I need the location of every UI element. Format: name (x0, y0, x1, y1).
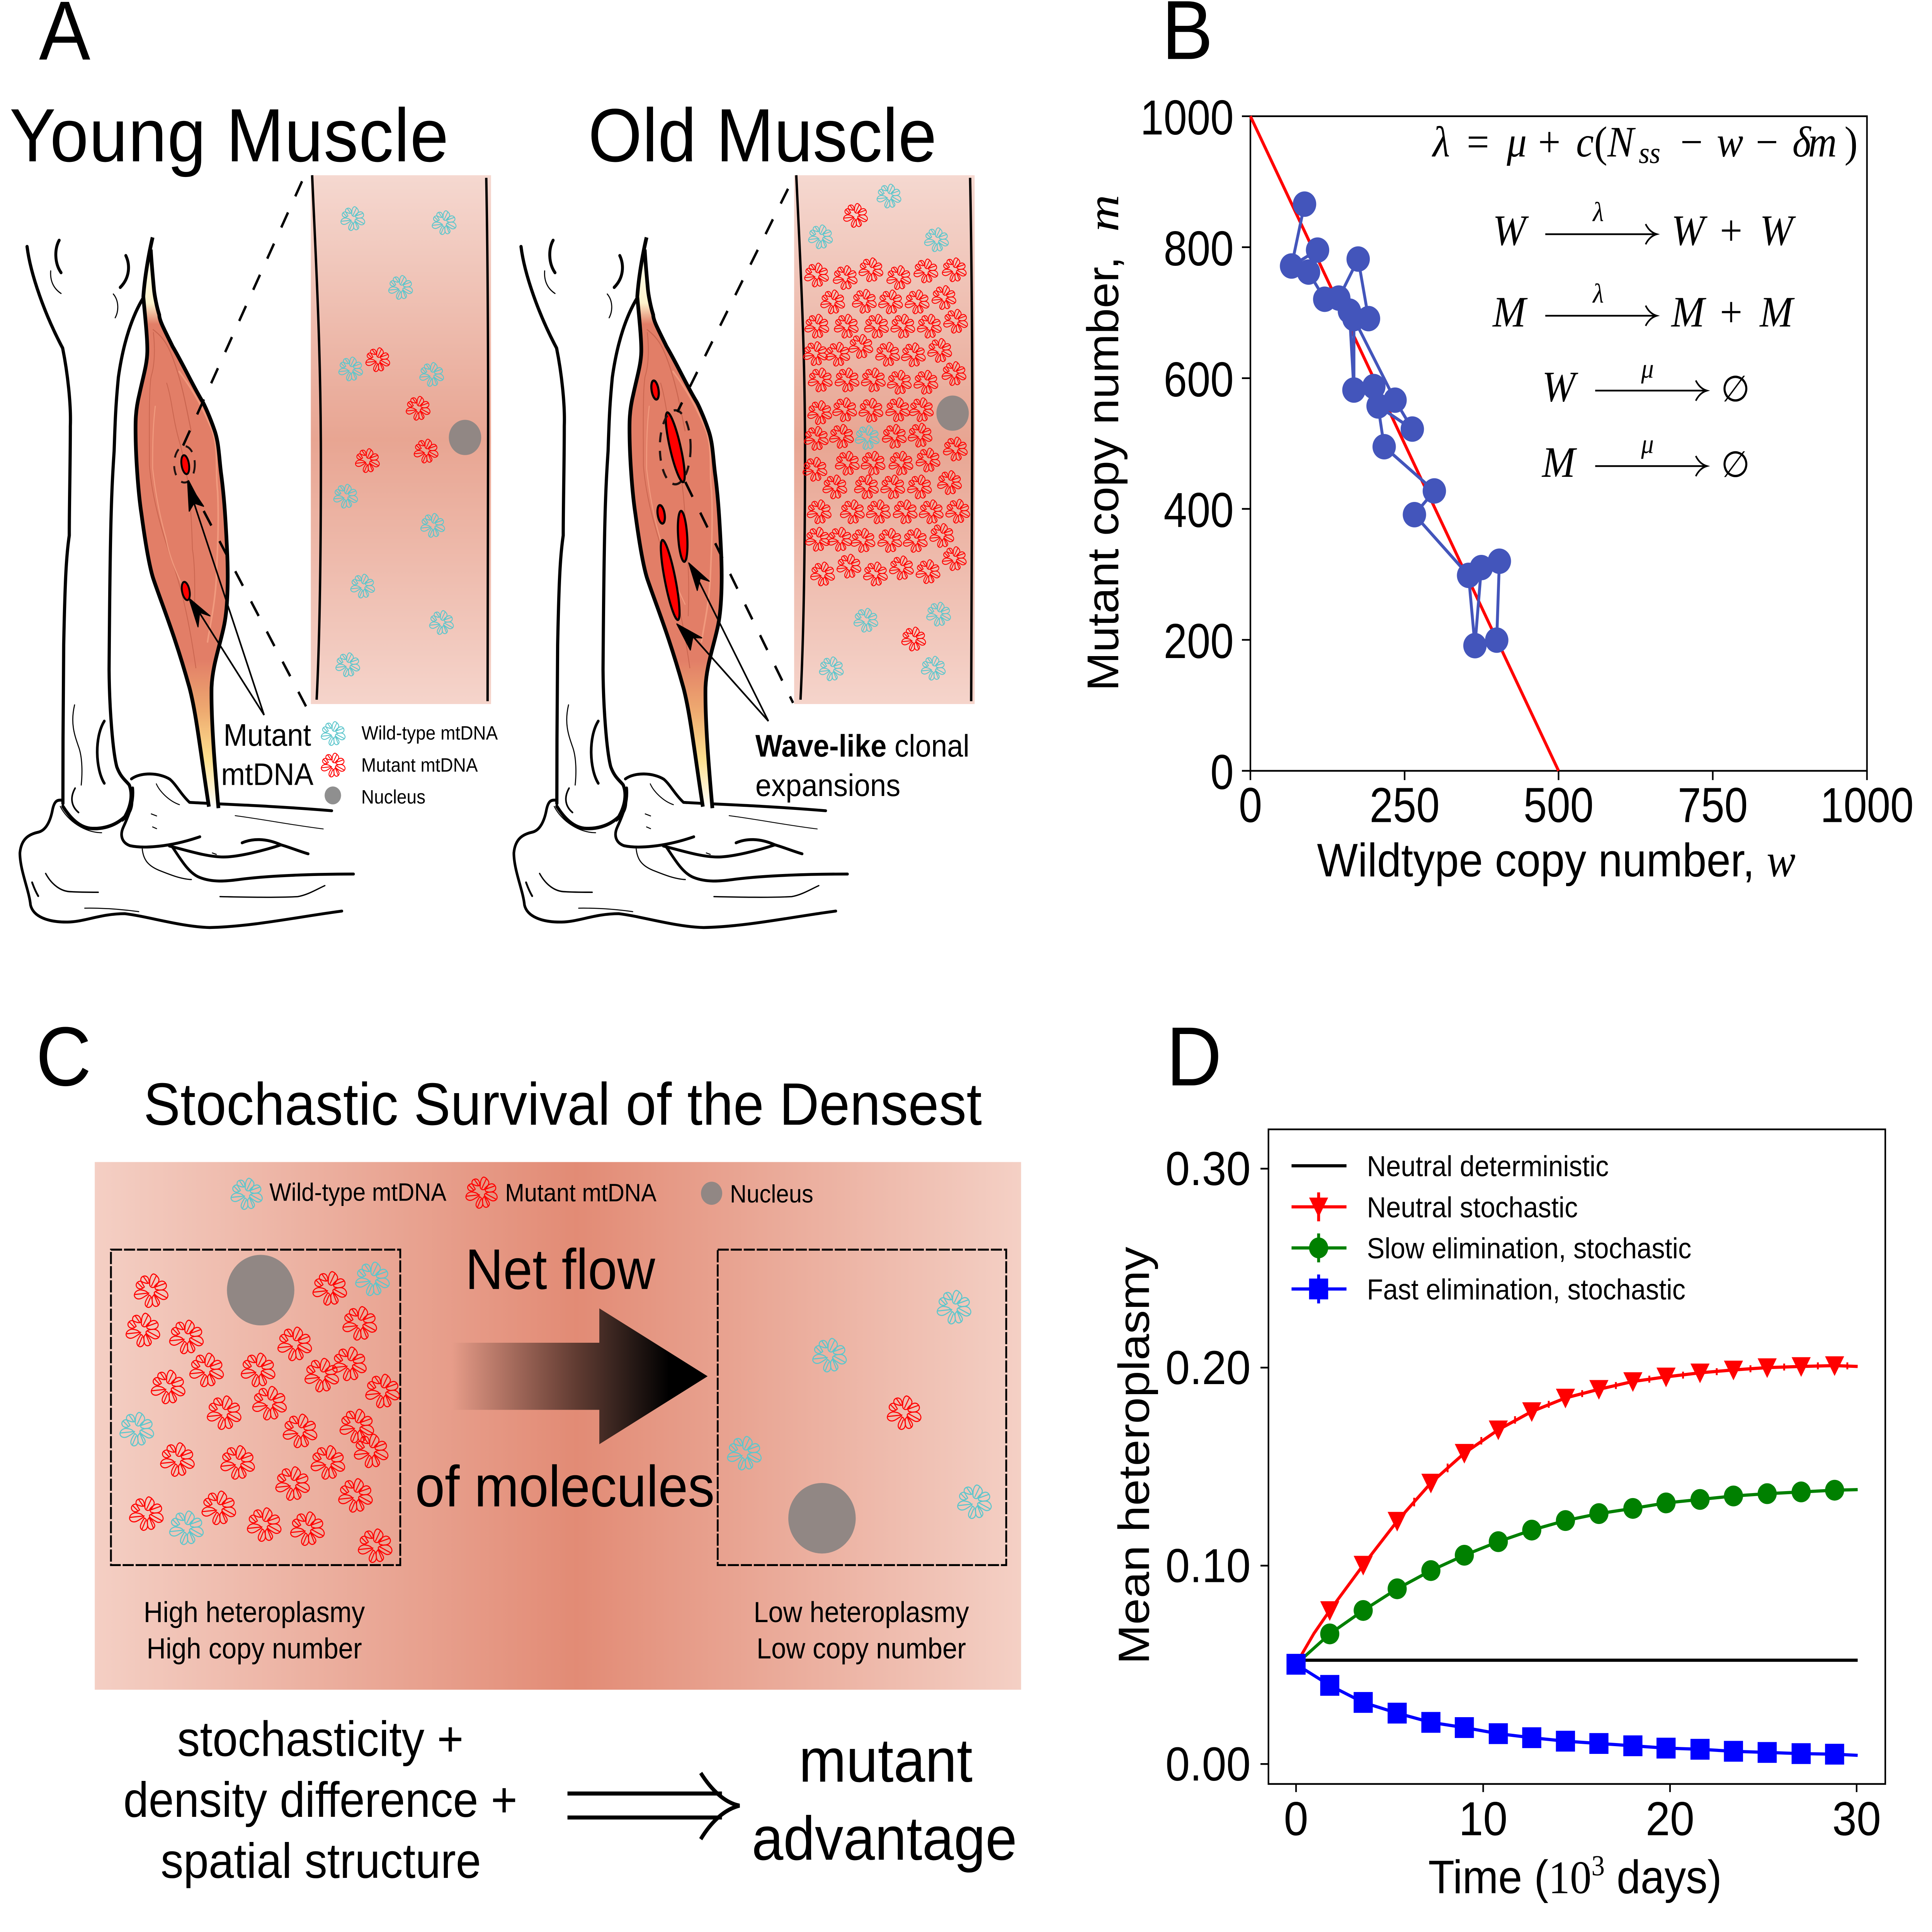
plot frame and axes (1260, 1129, 1885, 1792)
illustration: old arm with muscle (514, 237, 847, 927)
old muscle clonal expansions (650, 380, 690, 621)
nucleus, low density (788, 1483, 856, 1554)
x axis tick labels: 0 (1284, 1793, 1308, 1845)
neutral deterministic line (1296, 1658, 1858, 1662)
reaction: W to W + W (1493, 197, 1796, 255)
heading: Young Muscle: Young Muscle (10, 93, 449, 177)
legend, panel A (321, 722, 498, 808)
dashed zoom lines, young (183, 181, 307, 709)
reaction: M to empty: ∅ (1721, 445, 1750, 485)
trajectory line and points (1280, 191, 1511, 658)
rate equation: + (1538, 118, 1561, 166)
x axis tick labels: 10 (1459, 1793, 1507, 1845)
panel A: muscle illustrations (10, 0, 975, 927)
x axis tick labels: 20 (1646, 1793, 1694, 1845)
y axis label: Mean heteroplasmy (1110, 1247, 1158, 1664)
legend, panel A: Mutant mtDNA (361, 754, 478, 776)
legend, panel A: Wild-type mtDNA (362, 722, 498, 744)
reaction: M to M + M: M (1492, 288, 1528, 336)
panel B: phase plane plot (1078, 0, 1914, 887)
heading: Stochastic Survival of the Densest: Stochastic Survival of the Densest (144, 1070, 982, 1138)
nucleus, old (936, 396, 969, 431)
x axis label: 3 (1592, 1850, 1605, 1882)
rate equation: δ (1793, 118, 1811, 166)
illustration: young arm with muscle (20, 237, 354, 927)
y axis tick labels: 0.00 (1165, 1738, 1251, 1791)
slow elimination curve (1296, 1480, 1858, 1664)
rate equation: w (1717, 118, 1743, 166)
text: mutant advantage (752, 1726, 1017, 1873)
text: stochasticity, density difference, spatial structure: spatial structure (161, 1833, 481, 1889)
reaction: W to empty (1542, 353, 1750, 411)
rate equation: − (1680, 118, 1703, 166)
wild-type mtDNA molecules, old (809, 184, 951, 680)
reaction: M to M + M: M (1759, 288, 1795, 336)
young muscle fibre zoom panel (311, 175, 491, 704)
caption: low heteroplasmy: Low heteroplasmy (753, 1596, 969, 1629)
old muscle fibre zoom panel (794, 175, 975, 704)
x axis tick labels: 500 (1524, 778, 1594, 833)
rate equation: ) (1844, 118, 1858, 166)
y axis tick labels (1165, 1143, 1251, 1791)
heading: Old Muscle: Old Muscle (588, 93, 937, 177)
low density box (718, 1250, 1006, 1565)
gradient background panel (95, 1162, 1021, 1690)
x axis tick labels (1284, 1793, 1881, 1845)
rate equation: c (1576, 118, 1594, 166)
mutant mtDNA molecules, young (355, 348, 438, 473)
y axis tick labels: 800 (1164, 221, 1234, 276)
legend, panel D: Fast elimination, stochastic (1367, 1274, 1685, 1306)
nucleus, young (449, 420, 481, 455)
mutant mtDNA molecules, old (803, 204, 969, 651)
x axis tick labels: 250 (1370, 778, 1440, 833)
reaction: W to W + W: W (1760, 207, 1796, 255)
dashed zoom lines, old (677, 189, 793, 703)
caption: low heteroplasmy: Low copy number (757, 1633, 966, 1665)
caption: low heteroplasmy (753, 1596, 969, 1665)
x axis tick labels (1239, 778, 1914, 833)
reaction: W to empty: μ (1641, 353, 1654, 384)
reaction: W to W + W: W (1493, 207, 1529, 255)
label: Wave-like clonal expansions (755, 729, 969, 803)
rate equation: ( (1594, 118, 1607, 166)
rate equation: = (1467, 118, 1489, 166)
y axis label: m (1079, 195, 1128, 232)
reaction: M to empty: M (1541, 439, 1577, 486)
reaction: M to M + M (1492, 278, 1795, 336)
y axis tick labels: 0.20 (1165, 1342, 1251, 1395)
fast elimination curve (1286, 1654, 1858, 1765)
panel letter C: C (36, 1010, 92, 1104)
rate equation: μ (1507, 118, 1527, 166)
text: stochasticity, density difference, spatial structure: density difference + (123, 1773, 517, 1828)
label: Wave-like clonal expansions: Wave-like clonal (755, 729, 969, 764)
y axis tick labels: 0.10 (1165, 1539, 1251, 1593)
reaction: M to empty (1541, 429, 1750, 486)
legend, panel C: Wild-type mtDNA (269, 1178, 447, 1206)
reaction: W to empty: ∅ (1721, 369, 1750, 409)
text: mutant advantage: mutant (799, 1726, 973, 1795)
reaction: M to M + M: M (1671, 288, 1706, 336)
rate equation: ss (1639, 136, 1660, 170)
reaction: W to W + W: λ (1592, 197, 1604, 227)
y axis label: Mutant copy number, (1078, 257, 1128, 691)
mutant molecules, high density (126, 1272, 400, 1562)
text: stochasticity, density difference, spatial structure (123, 1712, 517, 1889)
reaction: W to W + W: W (1671, 207, 1708, 255)
legend, panel D: Neutral deterministic (1367, 1150, 1609, 1183)
legend, panel D: Slow elimination, stochastic (1367, 1233, 1691, 1265)
x axis label: Time (10 (1428, 1851, 1592, 1904)
x axis tick labels: 0 (1239, 778, 1262, 833)
x axis tick labels: 750 (1678, 778, 1748, 833)
rate equation: N (1607, 118, 1636, 166)
legend, panel C: Mutant mtDNA (505, 1179, 656, 1207)
y axis tick labels: 200 (1164, 614, 1234, 669)
legend, panel C (231, 1177, 813, 1209)
panel D: mean heteroplasmy plot (1110, 1010, 1885, 1904)
y axis tick labels: 0 (1210, 745, 1234, 800)
reaction: M to empty: μ (1641, 429, 1654, 459)
x axis tick labels: 1000 (1820, 778, 1914, 833)
neutral stochastic curve (1296, 1356, 1858, 1664)
gradient net flow arrow (452, 1308, 707, 1444)
arrows to clonal expansions, old (677, 563, 769, 721)
wild-type molecules, low density (728, 1291, 991, 1519)
caption: high heteroplasmy: High copy number (146, 1633, 362, 1665)
y axis tick labels (1140, 90, 1234, 800)
text: stochasticity, density difference, spatial structure: stochasticity + (177, 1712, 464, 1767)
reaction: M to M + M: + (1720, 288, 1742, 336)
label: Wave-like clonal expansions: expansions (755, 768, 900, 803)
wild-type mtDNA molecules, young (334, 207, 456, 677)
reaction: W to empty: W (1542, 363, 1578, 411)
legend, panel A: Nucleus (361, 786, 425, 808)
nucleus, high density (227, 1255, 294, 1325)
legend, panel D (1291, 1150, 1691, 1306)
x axis label: days) (1605, 1851, 1722, 1903)
text: Net flow: Net flow (465, 1237, 656, 1301)
y axis tick labels: 1000 (1140, 90, 1234, 145)
x axis tick labels: 30 (1832, 1793, 1881, 1845)
text: mutant advantage: advantage (752, 1804, 1017, 1873)
legend, panel C: Nucleus (730, 1180, 813, 1208)
caption: high heteroplasmy (144, 1596, 365, 1665)
label: Mutant mtDNA: Mutant (223, 718, 311, 753)
arrows to mutant mtDNA, young (188, 482, 264, 715)
plot frame and axes (1242, 116, 1867, 780)
young muscle clonal spots (174, 446, 195, 601)
rate equation: − (1756, 118, 1778, 166)
rate equation: λ (1432, 118, 1450, 166)
red nullcline line (1250, 116, 1559, 771)
caption: high heteroplasmy: High heteroplasmy (144, 1596, 365, 1629)
high density box (111, 1250, 400, 1565)
mutant molecule, low density (887, 1396, 921, 1429)
y axis tick labels: 600 (1164, 352, 1234, 407)
reaction: W to W + W: + (1720, 207, 1742, 255)
panel letter D: D (1166, 1010, 1222, 1104)
label: Mutant mtDNA: mtDNA (221, 757, 313, 792)
y axis tick labels: 0.30 (1165, 1143, 1251, 1196)
x axis label: Wildtype copy number, w (1317, 834, 1796, 887)
text: of molecules: of molecules (415, 1454, 714, 1519)
reaction: M to M + M: λ (1592, 278, 1604, 309)
y axis tick labels: 400 (1164, 483, 1234, 538)
legend, panel D: Neutral stochastic (1367, 1192, 1578, 1224)
panel C: stochastic survival of the densest (36, 1010, 1021, 1889)
label: Mutant mtDNA (221, 718, 313, 792)
rate equation: m (1808, 118, 1837, 166)
implies arrow (568, 1773, 740, 1839)
wild-type molecules, high density (120, 1262, 389, 1544)
